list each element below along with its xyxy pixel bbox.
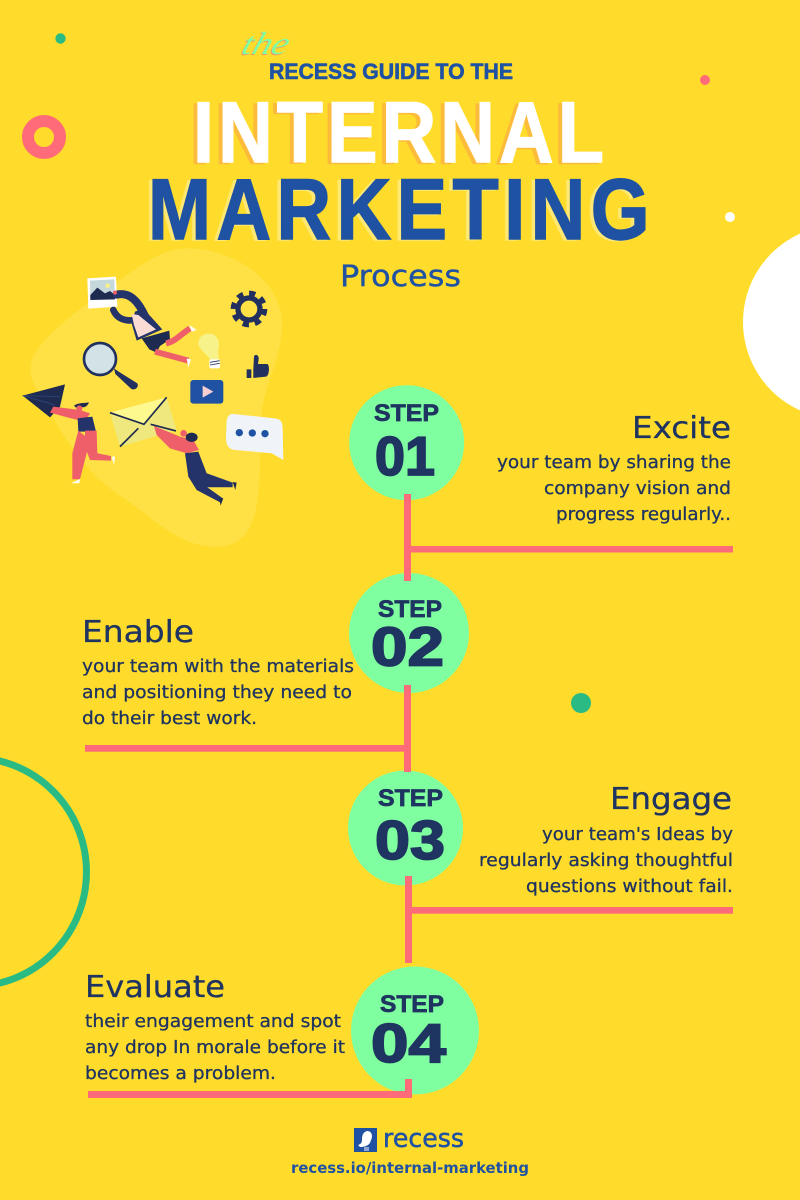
icon: speech bubble	[226, 414, 283, 460]
step 2 text: do their best work.	[82, 708, 257, 729]
step 1 badge: STEP	[374, 400, 439, 427]
script word: the: the	[236, 28, 294, 63]
step 2 text: Enable	[82, 615, 194, 650]
step 4 badge: STEP	[380, 991, 444, 1018]
icon: light bulb	[198, 334, 220, 368]
decorative green ring	[0, 758, 86, 986]
step 1 badge: 01	[375, 425, 435, 487]
wordmark: recess	[383, 1124, 464, 1154]
icon: recess logo	[354, 1128, 377, 1152]
step 4 badge: 04	[371, 1012, 446, 1074]
heading: marketing: MARKETING	[144, 164, 646, 259]
website url: recess.io/internal-marketing	[291, 1159, 529, 1177]
icon: envelope	[110, 397, 177, 447]
decorative white dot	[725, 212, 735, 222]
subheading: process: Process	[340, 259, 461, 293]
step 1 text	[497, 411, 731, 525]
figure: woman holding plane	[50, 402, 115, 483]
step 2 text: your team with the materials	[82, 656, 354, 677]
title block	[144, 27, 650, 293]
step 4 text: their engagement and spot	[85, 1011, 341, 1032]
heading: internal: INTERNAL	[189, 87, 600, 183]
step 4 text: becomes a problem.	[85, 1063, 276, 1084]
decorative green dot top left	[55, 33, 66, 44]
step 4 text: any drop In morale before it	[85, 1037, 345, 1058]
step 4 text	[85, 970, 345, 1084]
step 3 text: Engage	[610, 782, 732, 817]
decorative pink ring	[28, 121, 60, 153]
decorative pink dot	[700, 75, 710, 85]
decorative green dot middle	[571, 693, 591, 713]
timeline connectors	[85, 494, 733, 1098]
heading: recess guide to the: RECESS GUIDE TO THE	[269, 59, 513, 84]
step 1 text: progress regularly..	[556, 504, 731, 525]
icon: paper plane	[23, 384, 65, 417]
step 3 text: your team's Ideas by	[542, 824, 733, 845]
step 1 text: Excite	[632, 411, 731, 446]
icon: gear	[233, 293, 265, 325]
step 3 badge: STEP	[378, 785, 443, 812]
footer brand	[291, 1124, 529, 1177]
decorative large white circle	[743, 225, 800, 419]
step 2 text: and positioning they need to	[82, 682, 352, 703]
step 3 text: regularly asking thoughtful	[479, 850, 733, 871]
icon: thumbs up	[247, 355, 269, 378]
heading: internal: INTERNAL	[193, 86, 604, 181]
step 2 badge	[349, 573, 469, 693]
script word: the: the	[237, 27, 295, 62]
step 2 text	[82, 615, 354, 729]
step 3 badge	[348, 770, 463, 886]
figure: flying man	[113, 291, 197, 368]
step 3 text	[479, 782, 733, 897]
illustration: people flying with marketing icons	[23, 248, 283, 547]
step 1 text: your team by sharing the	[497, 452, 731, 473]
illustration backdrop blob	[31, 248, 282, 547]
figure: flying woman with envelope	[154, 426, 237, 506]
step 1 text: company vision and	[544, 478, 731, 499]
step 2 badge: 02	[371, 616, 444, 678]
step 2 badge: STEP	[378, 596, 442, 623]
step 4 badge	[351, 966, 479, 1094]
icon: magnifying glass	[84, 343, 138, 389]
step 3 badge: 03	[375, 809, 445, 871]
icon: photo	[87, 277, 117, 309]
step 3 text: questions without fail.	[526, 876, 733, 897]
step 1 badge	[349, 385, 464, 500]
step 4 text: Evaluate	[85, 970, 225, 1005]
icon: video play button	[190, 380, 223, 404]
heading: marketing: MARKETING	[148, 163, 650, 258]
